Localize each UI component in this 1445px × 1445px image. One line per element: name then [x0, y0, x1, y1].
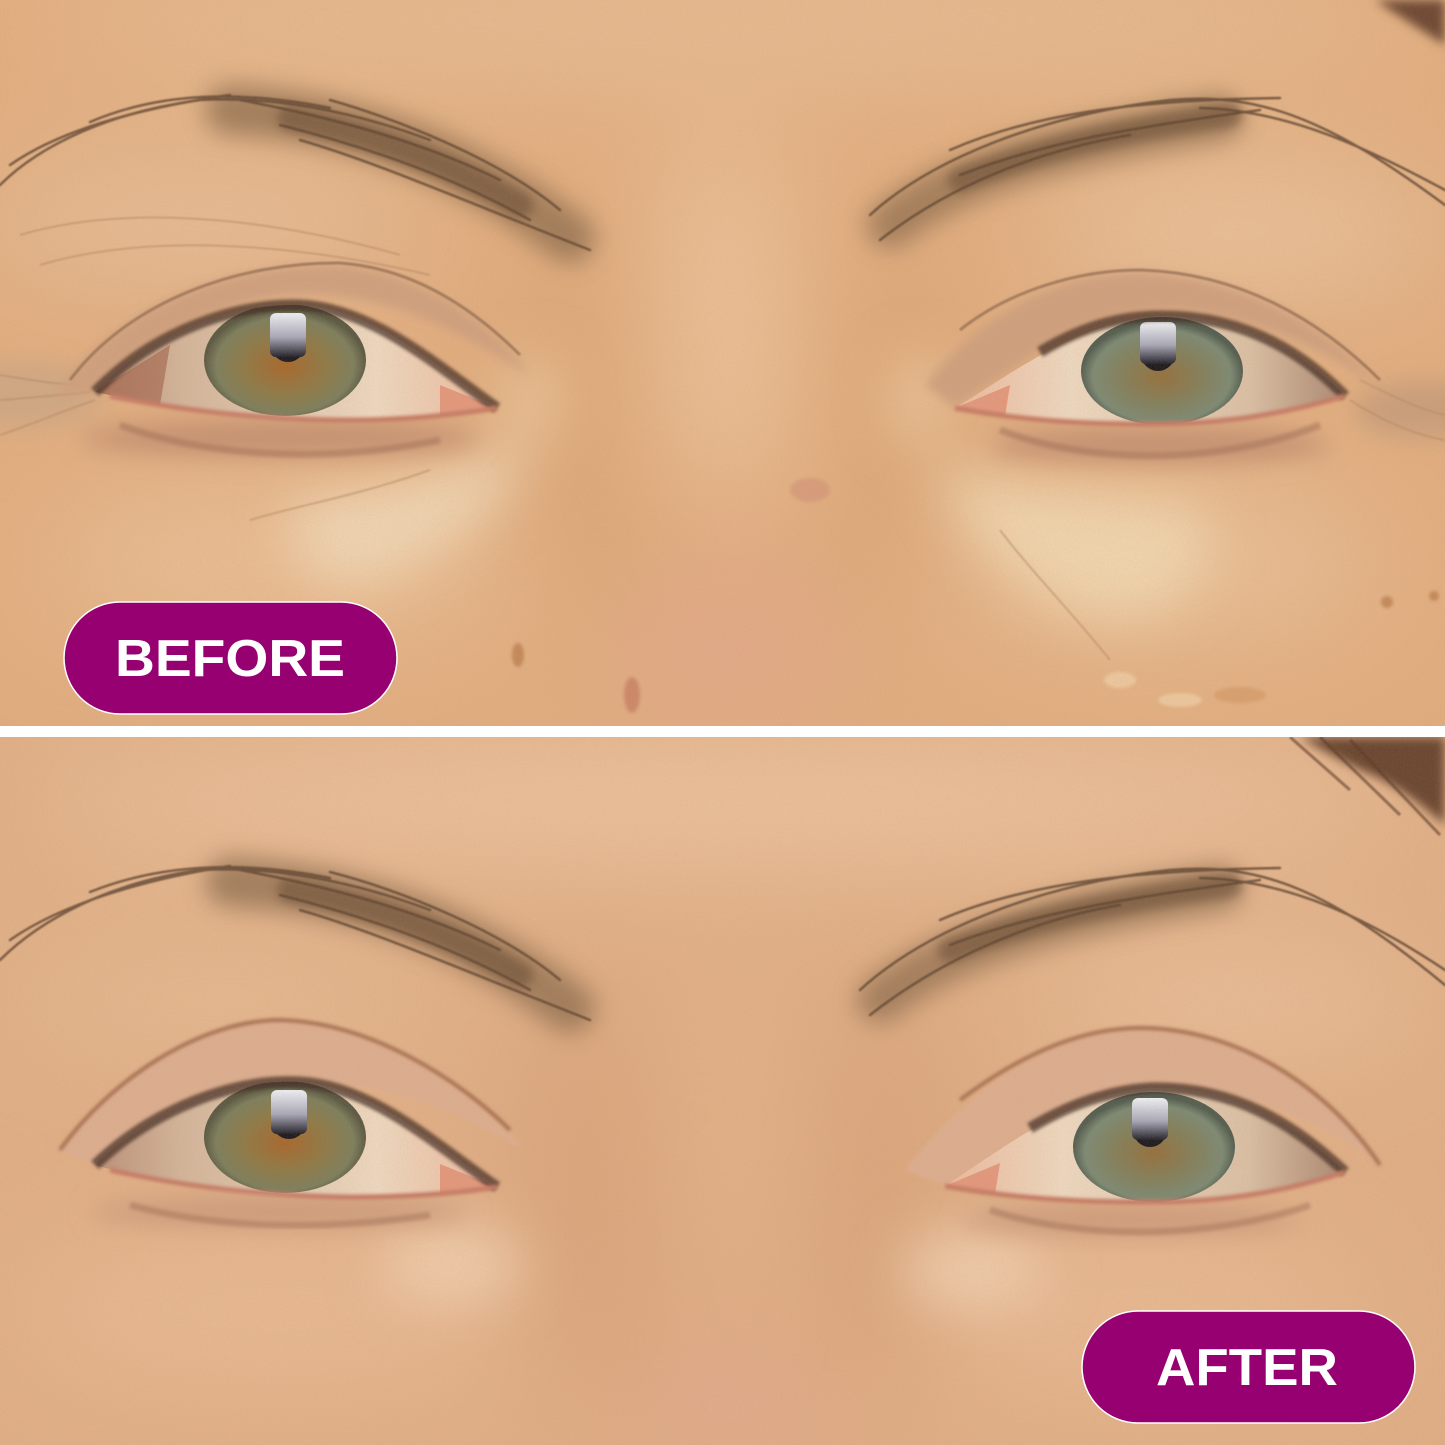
badge: before: [64, 602, 397, 714]
hair top right: [1375, 0, 1445, 45]
eyebrow right after: [860, 868, 1445, 1015]
photo: after: [0, 737, 1445, 1445]
under-eye highlight left: [289, 445, 525, 585]
eyebrow left: [0, 95, 590, 250]
right eye after: [905, 1028, 1380, 1232]
left eye after: [60, 1020, 525, 1225]
right eye before: [925, 270, 1385, 456]
skin spots before: [512, 478, 1439, 713]
hair top right after: [1290, 737, 1445, 835]
eyebrow left after: [0, 866, 590, 1020]
badge: after: AFTER: [1156, 1339, 1338, 1397]
badge: after: [1082, 1311, 1415, 1423]
divider: [0, 726, 1445, 737]
badge: before: BEFORE: [115, 630, 345, 688]
eyelid wrinkles before: [0, 218, 1445, 660]
eyebrow right: [870, 98, 1445, 240]
photo: before: [0, 0, 1445, 730]
left eye before: [55, 263, 530, 454]
